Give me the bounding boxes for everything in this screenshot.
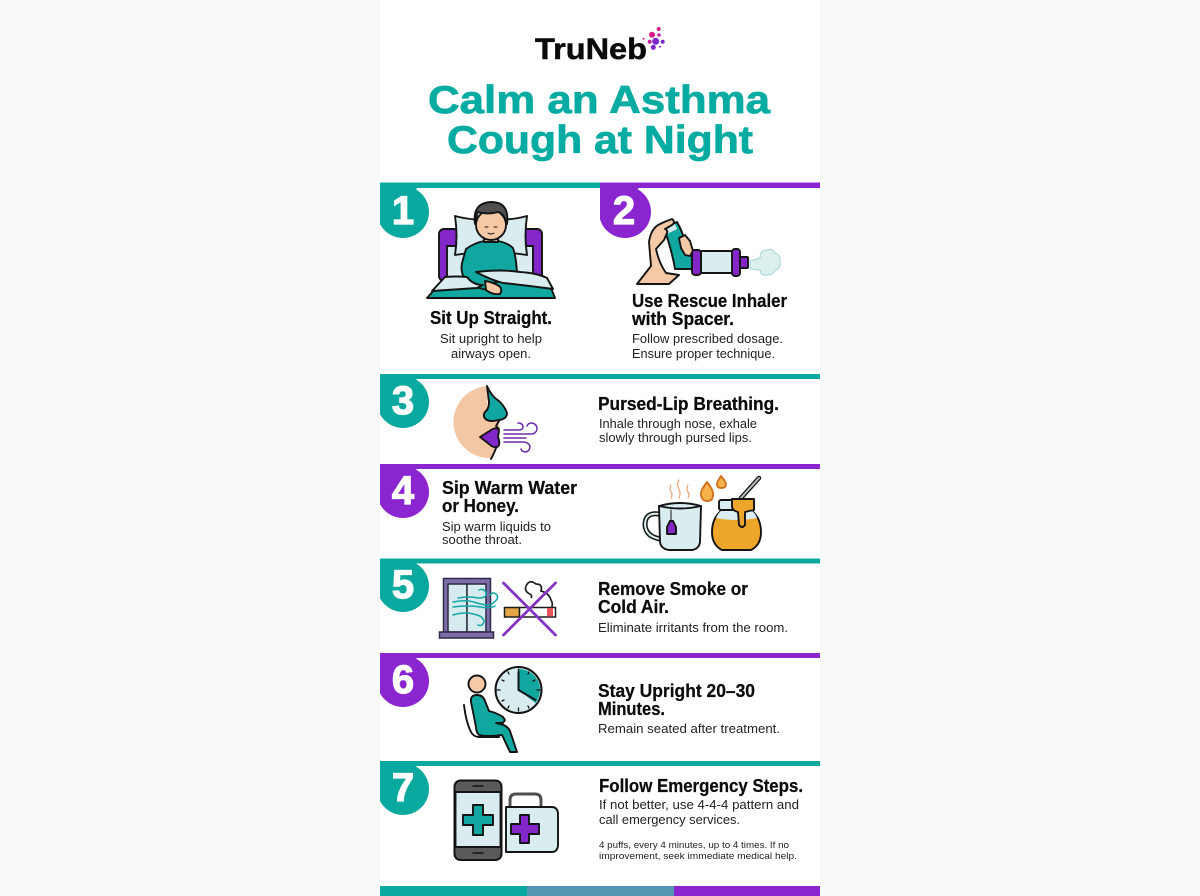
panel: step 7 follow emergency steps [377,761,820,862]
badge: number 2: 2 [613,189,635,233]
heading [598,579,748,617]
heading: Use Rescue Inhaler [632,291,787,311]
heading: Minutes. [598,699,665,719]
panel: step 6 stay upright [377,653,820,752]
description: Follow prescribed dosage. [632,332,783,346]
icon: person sitting in bed [427,202,555,298]
icon: inhaler with spacer [637,219,780,284]
note: 4-4-4 details: improvement, seek immediate medical help. [599,851,797,862]
infographic page [380,27,820,896]
logo: TruNeb: TruNeb [535,33,647,66]
badge: number 1 [377,186,429,238]
panel: step 5 remove smoke or cold air [377,558,820,638]
heading [598,681,755,719]
title [428,79,770,162]
icon: window with wind and crossed cigarette [440,578,556,638]
icon: face with pursed lips [453,386,537,459]
heading: Sip Warm Water [442,478,577,498]
description [599,417,757,445]
description: call emergency services. [599,813,740,827]
description [440,332,542,361]
icon: tea mug and honey jar [645,476,761,550]
description: Eliminate irritants from the room. [598,621,788,635]
badge: number 6: 6 [392,658,414,702]
badge: number 5 [380,564,429,612]
description [632,332,783,361]
title: Cough at Night [447,119,753,162]
heading: Stay Upright 20–30 [598,681,755,701]
description: Remain seated after treatment. [598,722,780,736]
badge: number 3 [380,379,429,428]
description: airways open. [451,347,531,361]
heading: Sit Up Straight. [430,308,552,328]
description: Inhale through nose, exhale [599,417,757,431]
description [599,798,799,827]
panel: step 3 pursed-lip breathing [377,374,820,459]
heading [631,291,787,329]
badge: number 4 [380,469,429,518]
logo: TruNeb [535,27,665,66]
badge: number 1: 1 [392,189,414,233]
badge: number 7: 7 [392,766,414,810]
heading: Remove Smoke or [598,579,748,599]
description [442,520,551,547]
icon: phone and first aid kit [454,780,558,860]
panel: step 2 rescue inhaler [599,182,820,361]
heading: with Spacer. [631,309,734,329]
badge: number 2 [599,186,651,238]
description: Sip warm liquids to [442,520,551,534]
note: 4-4-4 details [599,840,797,862]
badge: number 6 [380,658,429,707]
heading: Cold Air. [598,597,669,617]
heading: or Honey. [442,496,519,516]
description: Sit upright to help [440,332,542,346]
title: Calm an Asthma [428,79,770,122]
heading: Pursed-Lip Breathing. [598,394,779,414]
heading: Follow Emergency Steps. [599,776,803,796]
description: soothe throat. [442,533,522,547]
panel: step 1 sit up straight [377,182,600,361]
footer colour bar [380,886,820,896]
description: If not better, use 4-4-4 pattern and [599,798,799,812]
badge: number 4: 4 [392,469,415,513]
badge: number 3: 3 [392,379,414,423]
badge: number 7 [380,766,429,815]
note: 4-4-4 details: 4 puffs, every 4 minutes, up to 4 times. If no [599,840,789,851]
description: slowly through pursed lips. [599,431,752,445]
icon: seated person and clock [464,667,542,752]
heading [442,478,577,516]
panel: step 4 sip warm water or honey [377,464,820,550]
badge: number 5: 5 [392,563,414,607]
description: Ensure proper technique. [632,347,775,361]
